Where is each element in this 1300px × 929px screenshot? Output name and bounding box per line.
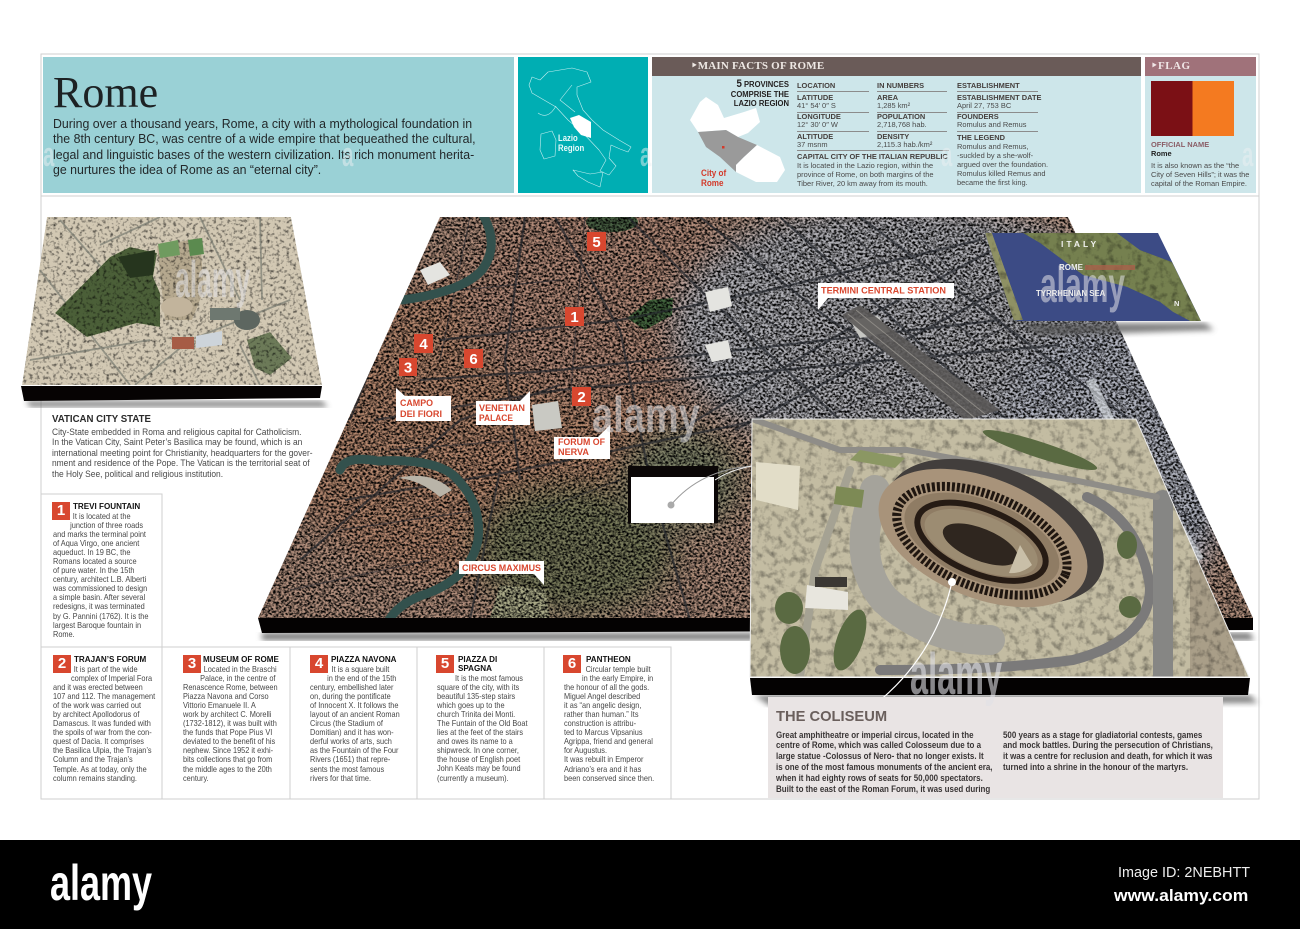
body: Column and the Trajan’s (53, 755, 133, 764)
label: Campo dei Fiori (396, 388, 451, 421)
watermarks: alamy (910, 642, 1002, 707)
area: AREA (877, 93, 898, 102)
city of Rome label: Rome (701, 178, 724, 188)
flag heading (1145, 57, 1256, 76)
flag note: City of Seven Hills”; it was the (1151, 170, 1249, 179)
body: quest of Dacia. It comprises (53, 737, 144, 746)
capital city text (797, 150, 949, 188)
body: junction of three roads (70, 521, 143, 530)
body: for Augustus. (564, 746, 607, 755)
legend: Romulus killed Remus and (957, 169, 1046, 178)
body: It is part of the wide (74, 664, 138, 674)
location heading: LOCATION (797, 81, 835, 90)
body: square of the city, with its (437, 683, 519, 692)
body: the Basilica Ulpia, the Trajan’s (53, 746, 152, 755)
Vatican City State text (52, 413, 313, 479)
watermarks: a (941, 136, 952, 174)
body: which goes up to the (437, 701, 505, 710)
railway tracks (842, 305, 1000, 420)
body: was commissioned to design (53, 584, 147, 593)
panel: intro (43, 57, 514, 193)
body: rivers for that time. (310, 774, 371, 783)
body: Rome. (53, 630, 75, 639)
Coliseum text column 2 (1003, 728, 1213, 772)
number (183, 655, 201, 673)
Coliseum text column 1: large statue -Colossus of Nero- that no longer exists. It (776, 750, 984, 761)
label: Circus Maximus: CIRCUS MAXIMUS (462, 563, 541, 573)
capital city text: province of Rome, on both margins of the (797, 170, 934, 179)
area (877, 93, 910, 110)
body: as the Fountain of the Four (310, 746, 398, 755)
watermarks: a (43, 136, 54, 174)
body: Rivers (1651) that repre- (310, 755, 390, 764)
column: establishment (957, 81, 1048, 187)
intro text: legal and linguistic bases of the western civilization. Its rich monument herita- (53, 148, 474, 162)
body: by architect Apollodorus of (53, 710, 139, 719)
roads (755, 420, 1163, 677)
official name: Rome (1151, 149, 1172, 158)
altitude (797, 132, 833, 149)
marker 2: 2 (577, 389, 586, 406)
legend: became the first king. (957, 178, 1028, 187)
legend (957, 133, 1048, 187)
numbers heading: IN NUMBERS (877, 81, 924, 90)
founders: Romulus and Remus (957, 120, 1026, 129)
body: aqueduct. In 19 BC, the (53, 548, 130, 557)
body: the funds that Pope Pius VI (183, 728, 272, 737)
heading bar: ‣MAIN FACTS OF ROME (691, 60, 824, 72)
marker 3 (399, 358, 417, 376)
body: of the work was carried out (53, 701, 141, 710)
city of Rome label: City of (701, 168, 726, 178)
number (310, 655, 328, 673)
marker 6 (464, 349, 483, 368)
establishment date (957, 93, 1042, 110)
Coliseum text column 1: is one of the most famous monuments of the ancient era, (776, 761, 993, 772)
body: a simple basin. After several (53, 593, 145, 602)
body: century, architect L.B. Alberti (53, 575, 146, 584)
Coliseum text column 1 (776, 728, 993, 794)
body: church Trinita dei Monti. (437, 710, 515, 719)
body: Piazza Navona and Corso (183, 692, 269, 701)
Lazio provinces map (690, 97, 785, 182)
longitude: 12° 30′ 0″ W (797, 120, 838, 129)
marker 5: 5 (592, 234, 601, 251)
legend: Romulus and Remus, (957, 142, 1029, 151)
cut-out hole in map (628, 466, 718, 523)
Vatican heading: VATICAN CITY STATE (52, 413, 151, 425)
body: rather than human.” Its (564, 710, 639, 719)
label: Termini Central Station: TERMINI CENTRAL STATION (821, 286, 946, 296)
body: construction is attribu- (564, 719, 636, 728)
body: work by architect C. Morelli (183, 710, 271, 719)
body: nephew. Since 1952 it exhi- (183, 746, 273, 755)
intro text: ge nurtures the idea of Rome as an “eternal city”. (53, 163, 321, 177)
watermarks: a (342, 136, 353, 174)
Vatican description: nment and residence of the Pope. The Vatican is the territorial seat of (52, 458, 310, 468)
legend: argued over the foundation. (957, 160, 1048, 169)
body: of Innocent X. It follows the (310, 701, 398, 710)
number: 3 (188, 655, 196, 672)
place labels (396, 283, 954, 585)
label: Venetian Palace (476, 391, 530, 425)
map markers (399, 232, 606, 406)
inset map labels: ITALY (1061, 239, 1099, 249)
latitude (797, 93, 836, 110)
heading: MUSEUM OF ROME (203, 654, 279, 664)
river Tiber (340, 215, 491, 622)
item 3: Museum of Rome (183, 654, 279, 783)
body: Circus (the Stadium of (310, 719, 383, 728)
watermarks: alamy (175, 251, 250, 309)
marker 4 (414, 334, 433, 353)
alamy logo: alamy (50, 855, 152, 911)
body: in the end of the 15th (327, 674, 396, 683)
body (564, 664, 654, 783)
body: Domitian) and it has won- (310, 728, 394, 737)
number: 1 (57, 502, 65, 519)
map of Italy (528, 68, 632, 188)
column: location (797, 81, 869, 149)
official name (1151, 140, 1209, 158)
body (183, 664, 278, 783)
body: the house of English poet (437, 755, 520, 764)
provinces heading: 5 PROVINCES (736, 78, 789, 90)
panel: flag (1145, 57, 1256, 193)
body: Temple. As at today, only the (53, 765, 147, 774)
establishment date: April 27, 753 BC (957, 101, 1011, 110)
body: of Aqua Virgo, one ancient (53, 539, 139, 548)
leader from hole to Coliseum (668, 466, 752, 508)
body: by G. Pannini (1762). It is the (53, 612, 148, 621)
body (53, 512, 148, 639)
body: It was rebuilt in Emperor (564, 755, 643, 764)
population: POPULATION (877, 112, 925, 121)
marker 1: 1 (570, 309, 579, 326)
city of Rome label (701, 168, 726, 188)
body: century, embellished later (310, 683, 393, 692)
Coliseum text column 1: when it had eighty rows of seats for 50,000 spectators. (776, 772, 983, 783)
watermarks: alamy (592, 387, 700, 443)
heading: TRAJAN’S FORUM (74, 654, 146, 664)
capital city text: It is located in the Lazio region, within the (797, 161, 933, 170)
label: Campo dei Fiori: CAMPO (400, 398, 433, 408)
map label: Lazio (558, 133, 578, 143)
body: the spoils of war from the con- (53, 728, 152, 737)
body: the middle ages to the 20th (183, 765, 272, 774)
altitude: 37 msnm (797, 140, 828, 149)
label: Campo dei Fiori: DEI FIORI (400, 409, 442, 419)
Coliseum text column 2: it was a centre for reclusion and death, for which it was (1003, 750, 1212, 761)
body: the honour of all the gods. (564, 683, 649, 692)
body: sents the most famous (310, 765, 384, 774)
number (53, 655, 71, 673)
body: Adriano’s era and it has (564, 765, 641, 774)
Coliseum 3D map (750, 419, 1258, 706)
marker 2 (572, 387, 591, 406)
establishment heading: ESTABLISHMENT (957, 81, 1020, 90)
altitude: ALTITUDE (797, 132, 833, 141)
body: Circular temple built (586, 664, 651, 674)
body: largest Baroque fountain in (53, 621, 141, 630)
body: shipwreck. In one corner, (437, 746, 519, 755)
number (52, 502, 70, 520)
body (310, 664, 400, 783)
body: and it was erected between (53, 683, 143, 692)
density: DENSITY (877, 132, 909, 141)
item 6: Pantheon (563, 654, 654, 783)
leader line and dot (878, 582, 952, 702)
area: 1,285 km² (877, 101, 910, 110)
body: lies at the feet of the stairs (437, 728, 523, 737)
Vatican description: City-State embedded in Roma and religious capital for Catholicism. (52, 427, 302, 437)
provinces heading: COMPRISE THE (731, 89, 789, 99)
population (877, 112, 927, 129)
website: www.alamy.com (1114, 886, 1248, 905)
Coliseum text column 1: Built to the east of the Roman Forum, it was used during (776, 783, 990, 794)
flag note: It is also known as the “the (1151, 161, 1239, 170)
inset map of central Italy (985, 233, 1214, 336)
footer bar (0, 840, 1300, 929)
body: century. (183, 774, 209, 783)
body: John Keats may be found (437, 764, 521, 773)
Vatican description (52, 427, 313, 479)
Vatican description: international meeting point for Christianity, headquarters for the gover- (52, 448, 313, 458)
image ID: Image ID: 2NEBHTT (1118, 864, 1250, 881)
body (437, 674, 528, 783)
flag of Rome (1151, 81, 1234, 136)
item 5: Piazza di Spagna (436, 654, 528, 783)
heading: TREVI FOUNTAIN (73, 501, 140, 511)
Coliseum text column 1: centre of Rome, which was called Colosseum due to a (776, 739, 981, 750)
label: Circus Maximus (459, 561, 544, 585)
item 4: Piazza Navona (310, 654, 400, 783)
number (436, 655, 454, 673)
inset map of central Italy: N (1174, 299, 1179, 308)
body: derful works of arts, such (310, 737, 392, 746)
intro text: During over a thousand years, Rome, a city with a mythological foundation in (53, 117, 472, 131)
Coliseum text column 1: Great amphitheatre or imperial circus, located in the (776, 728, 974, 740)
body: Damascus. It was funded with (53, 719, 151, 728)
marker 3: 3 (404, 360, 412, 376)
inset map of central Italy: ROME (1059, 263, 1084, 272)
body: it as “an angelic design, (564, 701, 641, 710)
body: column remains standing. (53, 774, 137, 783)
flag note (1151, 161, 1250, 188)
body: Miguel Angel described (564, 692, 640, 701)
watermarks: a (640, 136, 651, 174)
flag note: capital of the Roman Empire. (1151, 179, 1247, 188)
Vatican description: In the Vatican City, Saint Peter’s Basilica may be found, which is an (52, 437, 302, 447)
longitude: LONGITUDE (797, 112, 841, 121)
main satellite map of Rome (250, 200, 1260, 640)
item 1: Trevi Fountain (52, 501, 148, 639)
temple and gardens (756, 462, 800, 510)
body: Renascence Rome, between (183, 683, 278, 692)
number: 5 (441, 655, 449, 672)
maps (21, 217, 1259, 708)
capital city text: CAPITAL CITY OF THE ITALIAN REPUBLIC (797, 152, 948, 161)
label: Venetian Palace: PALACE (479, 413, 513, 423)
body: ted to Marcus Vipsanius (564, 728, 643, 737)
title: Rome (53, 68, 158, 117)
panel: Italy locator map (518, 57, 648, 193)
Coliseum text column 2: and mock battles. During the persecution of Christians, (1003, 739, 1213, 750)
label: Venetian Palace: VENETIAN (479, 403, 525, 413)
body: bits collections that go from (183, 755, 272, 764)
marker 5 (587, 232, 606, 251)
founders (957, 112, 1026, 129)
body (53, 664, 156, 783)
Vatican description: the Holy See, political and religious institution. (52, 469, 223, 479)
density: 2,115.3 hab./km² (877, 140, 932, 149)
column: in numbers (877, 81, 947, 149)
latitude: 41° 54′ 0″ S (797, 101, 836, 110)
heading: PANTHEON (586, 654, 631, 664)
marker 4: 4 (419, 336, 428, 353)
Vatican 3D map (21, 217, 328, 407)
body: It is the most famous (455, 674, 523, 682)
panel: The Coliseum text (768, 697, 1223, 798)
latitude: LATITUDE (797, 93, 833, 102)
body: The Funtain of the Old Boat (437, 719, 528, 728)
body: (1732-1812), it was built with (183, 719, 277, 728)
body: It is located at the (73, 512, 131, 520)
body: complex of Imperial Fora (71, 674, 152, 683)
body: Romans located a source (53, 557, 137, 566)
number: 2 (58, 655, 66, 672)
watermarks: a (1242, 136, 1253, 174)
inset map of central Italy: TYRRHENIAN SEA (1036, 289, 1106, 298)
body: It is a square built (332, 664, 389, 674)
heading (458, 654, 497, 673)
longitude (797, 112, 841, 129)
intro text (53, 117, 476, 177)
body: beautiful 135-step stairs (437, 692, 515, 701)
number: 4 (315, 655, 323, 672)
body: and marks the terminal point (53, 530, 146, 539)
intro text: the 8th century BC, was centre of a wide empire that bequeathed the cultural, (53, 132, 476, 146)
body: been conserved since then. (564, 774, 654, 783)
map label (558, 133, 584, 153)
Coliseum text column 2: turned into a shrine in the honour of the martyrs. (1003, 761, 1188, 772)
body: and owes its name to a (437, 737, 513, 746)
body: on, during the pontificate (310, 692, 391, 701)
body: in the early Empire, in (582, 674, 653, 683)
legend: -suckled by a she-wolf- (957, 151, 1033, 160)
heading: PIAZZA NAVONA (331, 654, 397, 664)
density (877, 132, 932, 149)
watermarks: alamy (1040, 257, 1125, 313)
flag heading: ‣FLAG (1151, 60, 1191, 72)
map label: Region (558, 143, 584, 153)
body: 107 and 112. The management (53, 692, 155, 701)
founders: FOUNDERS (957, 112, 999, 121)
landmark buildings (420, 262, 890, 431)
panel: main facts (652, 57, 1141, 193)
heading: SPAGNA (458, 663, 492, 673)
capital city text: Tiber River, 20 km away from its mouth. (797, 179, 928, 188)
body: Palace, in the centre of (200, 674, 275, 683)
marker 6: 6 (469, 351, 478, 368)
provinces heading: LAZIO REGION (734, 98, 789, 108)
body: Agrippa, friend and general (564, 737, 653, 746)
provinces heading (731, 78, 789, 108)
Tiber island (398, 476, 452, 497)
establishment date: ESTABLISHMENT DATE (957, 93, 1041, 102)
Coliseum heading: THE COLISEUM (776, 708, 887, 725)
label: Forum of Nerva: FORUM OF (558, 437, 605, 447)
population: 2,718,768 hab. (877, 120, 927, 129)
heading: PIAZZA DI (458, 654, 497, 664)
number (563, 655, 581, 673)
body: redesigns, it was terminated (53, 602, 145, 611)
official name: OFFICIAL NAME (1151, 140, 1209, 149)
body: Vittorio Emanuele II. A (183, 701, 256, 710)
Coliseum text column 2: 500 years as a stage for gladiatorial contests, games (1003, 728, 1202, 740)
body: Located in the Braschi (204, 664, 277, 674)
legend: THE LEGEND (957, 133, 1005, 142)
label: Termini Central Station (818, 283, 954, 310)
coliseum amphitheatre (859, 428, 1125, 640)
number: 6 (568, 655, 576, 672)
label: Forum of Nerva: NERVA (558, 447, 589, 457)
heading bar (652, 57, 1141, 76)
streets (300, 217, 1130, 620)
body: deviated to the benefit of his (183, 737, 275, 746)
item 2: Trajan's Forum (53, 654, 156, 783)
body: layout of an ancient Roman (310, 710, 400, 719)
label: Forum of Nerva (554, 425, 610, 459)
body: of pure water. In the 15th (53, 566, 135, 575)
marker 1 (565, 307, 584, 326)
body: (currently a museum). (437, 774, 509, 783)
